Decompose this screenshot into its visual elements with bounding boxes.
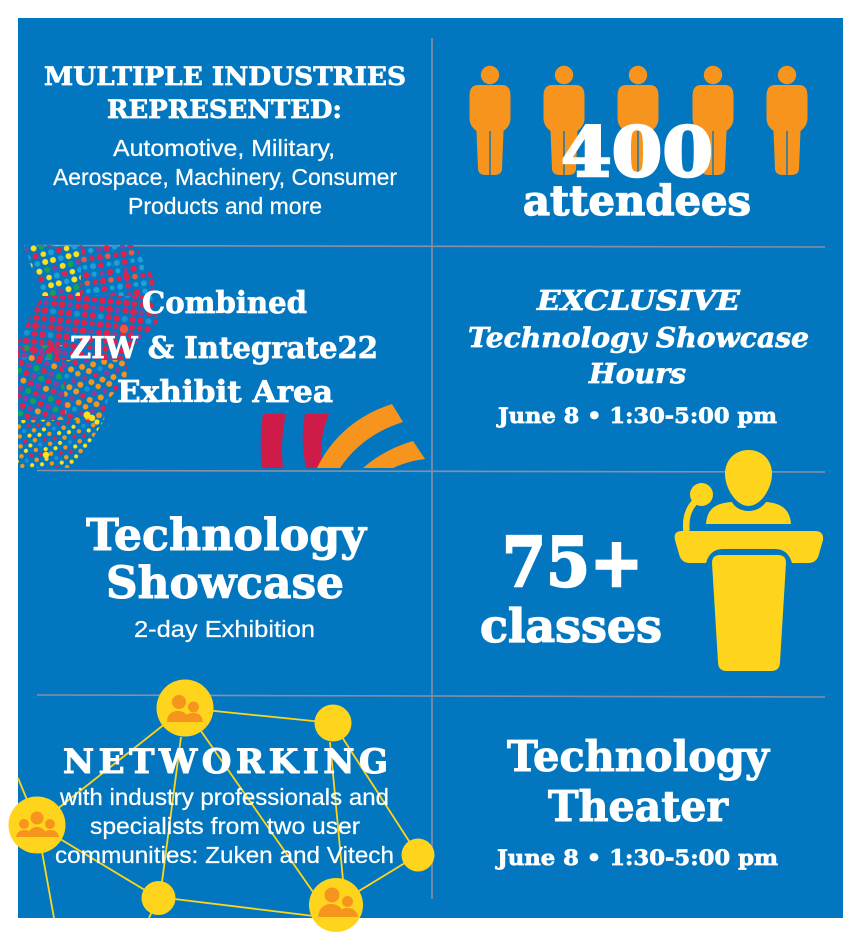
panel: exclusive showcase hours	[468, 286, 809, 428]
text: showcase date and time: June 8 • 1:30-5:00 pm	[496, 403, 777, 428]
text block: networking description	[55, 784, 394, 868]
panel: multiple industries	[44, 62, 406, 219]
heading: technology theater: Theater	[548, 782, 729, 831]
panel: 75+ classes	[480, 450, 823, 671]
text: 2-day exhibition: 2-day Exhibition	[134, 616, 315, 642]
text block: industries list	[53, 135, 397, 219]
heading: combined exhibit area: Combined	[142, 286, 307, 321]
panel: technology theater	[495, 732, 778, 870]
heading: combined exhibit area	[70, 286, 378, 410]
stat: 75+: 75+	[502, 523, 643, 603]
heading: multiple industries: MULTIPLE INDUSTRIES	[44, 62, 406, 91]
heading: exclusive technology showcase hours: EXCLUSIVE	[536, 286, 740, 317]
label: classes: classes	[480, 599, 662, 653]
heading: combined exhibit area: ZIW & Integrate22	[70, 331, 378, 366]
heading: technology theater	[507, 732, 771, 831]
panel: networking	[8, 680, 434, 932]
diagram: network of connected nodes	[8, 680, 434, 932]
heading: multiple industries: REPRESENTED:	[107, 95, 342, 124]
text block: networking description: with industry professionals and	[59, 784, 389, 810]
text block: networking description: communities: Zuken and Vitech	[55, 842, 394, 868]
decoration: crimson and orange arcs	[261, 404, 425, 468]
heading: combined exhibit area: Exhibit Area	[117, 375, 333, 410]
heading: technology showcase: Showcase	[106, 558, 344, 609]
text block: industries list: Aerospace, Machinery, Consumer	[53, 164, 397, 190]
panel: combined exhibit area	[18, 245, 425, 468]
heading: technology showcase	[86, 510, 367, 609]
text: theater date and time: June 8 • 1:30-5:00 pm	[495, 845, 778, 870]
text block: networking description: specialists from two user	[90, 813, 360, 839]
panel: 400 attendees	[470, 66, 808, 225]
panel: technology showcase	[86, 510, 367, 642]
text block: industries list: Products and more	[128, 193, 322, 219]
heading: multiple industries	[44, 62, 406, 124]
text block: industries list: Automotive, Military,	[113, 135, 335, 161]
heading: technology showcase: Technology	[86, 510, 367, 561]
icon: row of five people	[470, 66, 808, 175]
heading: networking: NETWORKING	[63, 742, 388, 782]
decoration: coloured dot fan	[18, 245, 158, 468]
heading: exclusive technology showcase hours: Hours	[588, 359, 686, 390]
heading: technology theater: Technology	[507, 732, 771, 781]
label: attendees: attendees	[523, 177, 751, 225]
heading: exclusive technology showcase hours	[468, 286, 809, 390]
heading: exclusive technology showcase hours: Technology Showcase	[468, 323, 809, 354]
stat: 400: 400	[561, 113, 713, 193]
icon: speaker at podium	[675, 450, 823, 671]
